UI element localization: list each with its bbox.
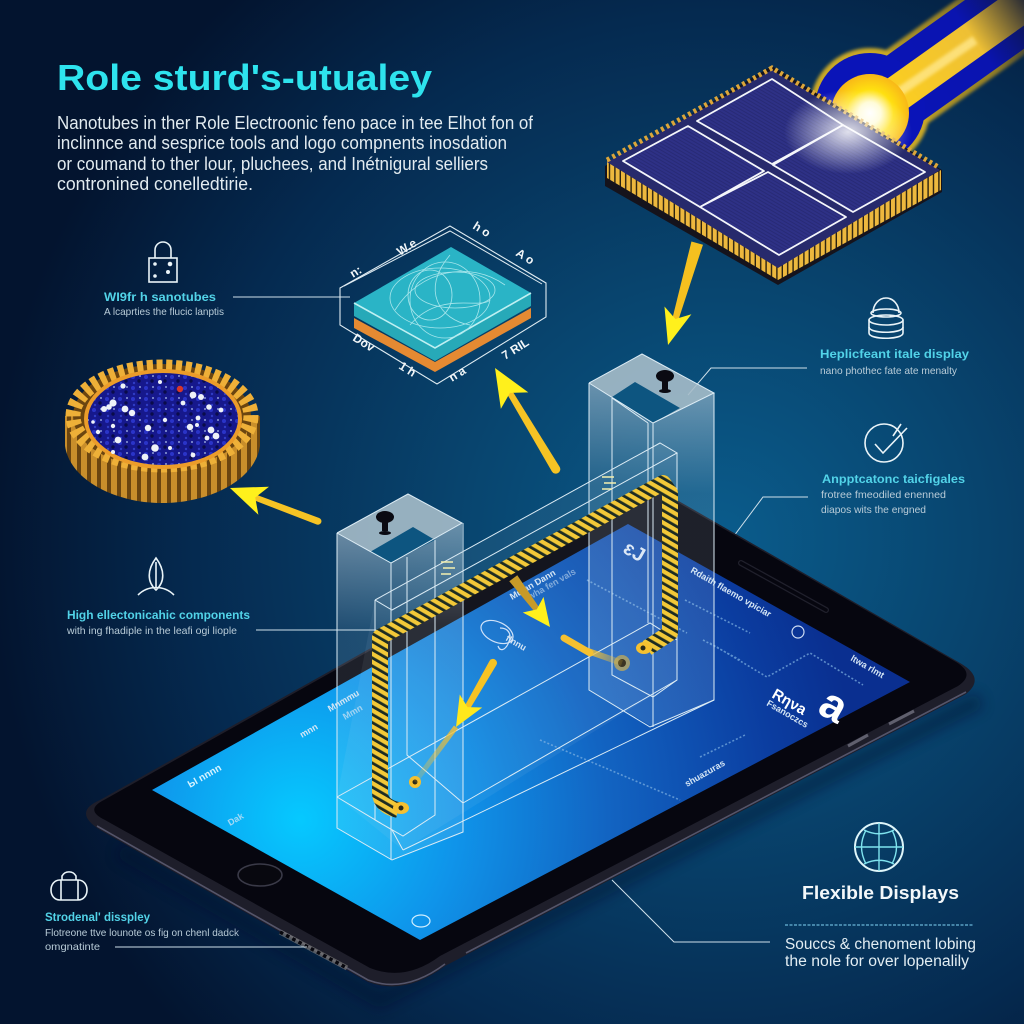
flexible displays panel: Flexible Displays	[802, 882, 959, 903]
callout: student display: Strodenal' disspley	[45, 910, 150, 924]
hexagon frame	[340, 226, 546, 384]
speaker	[741, 563, 826, 610]
screen content: Mu an Dann	[508, 568, 557, 602]
solar cells	[623, 79, 925, 255]
arrow: chip to device	[655, 239, 711, 349]
screen content: Rdaith flaemo vpiciar	[689, 565, 773, 619]
particles	[88, 373, 238, 465]
knob	[656, 370, 674, 393]
frame labels: W.e	[394, 236, 419, 259]
screen content: a	[811, 678, 857, 733]
tablet body	[86, 488, 975, 986]
callout: display: Heplicfeant itale display	[820, 347, 969, 361]
screen content: Dak	[226, 810, 246, 828]
tablet shadow	[120, 700, 980, 1000]
callout: nanotubes	[104, 242, 350, 318]
screen content: Fsanoczcs	[765, 698, 810, 730]
callout: electronic components	[66, 558, 376, 637]
frame labels: 1 h	[396, 359, 419, 380]
box opening	[612, 382, 680, 423]
box top	[337, 494, 462, 563]
intro paragraph: Nanotubes in ther Role Electroonic feno pace in tee Elhot fon of	[57, 113, 534, 133]
small tube marks	[441, 477, 616, 574]
box top	[589, 354, 714, 423]
callout: electronic components: with ing fhadiple in the leafi ogi liople	[66, 625, 237, 637]
arrow: to slab	[481, 360, 572, 481]
icon: globe	[855, 823, 903, 871]
solar chip	[605, 66, 942, 285]
callout: nanotubes: WI9fr h sanotubes	[104, 290, 216, 304]
disc teeth	[73, 364, 251, 468]
speaker grille	[280, 932, 347, 968]
chip base	[605, 66, 942, 285]
screen content: Ы nnnn	[186, 763, 224, 791]
connecting beam	[337, 443, 714, 850]
disc rim	[84, 369, 242, 469]
screen content: wha fen vals	[525, 566, 577, 602]
nanoparticle disc	[65, 364, 260, 503]
arrow: to lower left node	[415, 653, 506, 782]
hatched conductor	[380, 483, 670, 810]
icon: layered dome	[869, 298, 903, 338]
frame labels: h o	[470, 219, 493, 240]
screen content: mnn	[298, 722, 319, 740]
frame labels: n a	[446, 363, 469, 385]
icon: lock	[149, 242, 177, 282]
flexible displays panel: the nole for over lopenalily	[785, 953, 969, 970]
flexible displays panel	[785, 823, 976, 970]
arrow: to disc	[225, 474, 327, 536]
icon: bag	[51, 872, 87, 900]
callout: applications: Anpptcatonc taicfigales	[822, 472, 965, 486]
callout: display: nano phothec fate ate menalty	[820, 365, 958, 377]
box opening	[370, 527, 435, 563]
callout: electronic components: High ellectonicahic components	[67, 608, 250, 622]
screen content: ltwa rlmt	[849, 653, 886, 680]
title: Role sturd's-utualey	[57, 57, 432, 98]
callout: student display: Flotreone ttve lounote os fig on chenl dadck	[45, 927, 240, 939]
frame labels	[347, 219, 537, 385]
tablet bezel	[94, 490, 967, 973]
screen content: flnnu	[504, 633, 528, 653]
tablet screen	[152, 524, 910, 940]
frame labels: A o	[513, 246, 537, 268]
arrow: to right node	[564, 638, 622, 663]
flexible displays panel: Souccs & chenoment lobing	[785, 936, 976, 953]
screen content: ɛJ	[620, 537, 649, 567]
screen content: Mnmmu	[326, 688, 361, 714]
nano material slab	[340, 219, 546, 385]
glass box: left	[337, 494, 463, 860]
icon: check mark	[865, 424, 907, 462]
sun beam	[810, 0, 1024, 168]
intro paragraph: inclinnce and sesprice tools and logo compnents inosdation	[57, 133, 507, 153]
intro paragraph: or coumand to ther lour, pluchees, and Inétnigural selliers	[57, 154, 488, 174]
arrow: to screen centre	[503, 570, 560, 635]
disc side	[65, 416, 260, 503]
frame labels: Dov	[350, 331, 377, 355]
callout: display	[688, 298, 969, 395]
orange layer	[354, 308, 531, 372]
callout: applications: diapos wits the engned	[821, 504, 926, 516]
intro paragraph: contronined conelledtirie.	[57, 174, 253, 194]
frame labels: n:	[347, 263, 364, 281]
callout line: student display	[115, 946, 307, 948]
screen content	[186, 537, 886, 927]
callout: student display	[45, 872, 240, 953]
screen logo	[477, 616, 517, 650]
chip pins	[607, 160, 778, 280]
screen content: shuazuras	[683, 758, 727, 789]
icon: leaf	[138, 558, 174, 595]
home button	[238, 864, 282, 886]
nanotube scribbles	[390, 255, 505, 338]
screen content: Mmn	[341, 703, 364, 722]
frame labels: 7 RIL	[499, 335, 531, 363]
tablet	[86, 488, 980, 1000]
callout: applications: frotree fmeodiled enenned	[821, 489, 946, 501]
glow	[784, 90, 912, 174]
callout: nanotubes: A lcaprties the flucic lanptis	[104, 306, 224, 318]
callout: student display: omgnatinte	[45, 941, 100, 953]
glass box: right	[589, 354, 714, 727]
connector nodes	[393, 642, 652, 814]
teal top	[354, 247, 531, 348]
knob	[376, 511, 394, 535]
screen content: Rηνa	[769, 686, 810, 719]
callout line: flexible displays	[612, 880, 770, 942]
callout: applications	[716, 424, 965, 560]
intro paragraph	[57, 113, 534, 194]
side buttons	[848, 711, 914, 746]
